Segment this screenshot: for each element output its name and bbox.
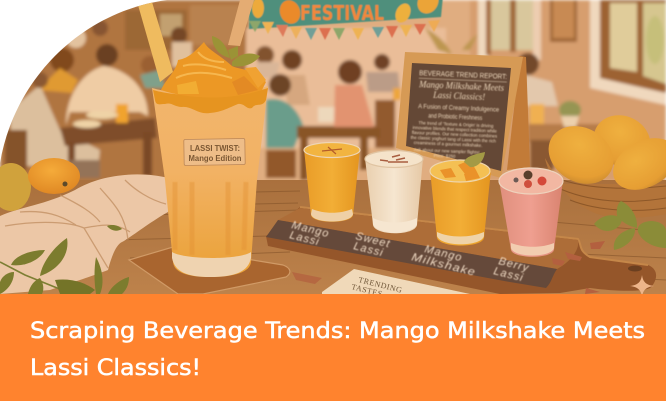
banner mango icons — [252, 0, 443, 27]
sign body: The trend of 'Texture & Origin' is driving — [418, 120, 494, 129]
paddle board: Lassi — [492, 265, 525, 284]
label: mango milkshake: Mango — [423, 243, 464, 264]
menu sign on easel: Lassi Classics! — [432, 90, 485, 102]
mint sprig left — [0, 225, 129, 294]
menu sign on easel — [396, 52, 530, 178]
picture frame — [550, 0, 577, 42]
wooden spoon — [228, 0, 254, 46]
sign heading: BEVERAGE TREND REPORT: — [419, 68, 507, 81]
basket of mangoes — [545, 115, 666, 211]
label: berry lassi: Berry — [497, 255, 531, 275]
glass label: Mango Edition — [188, 153, 242, 163]
basket — [545, 158, 666, 192]
menu sign on easel: innovative blends that respect tradition while — [412, 125, 498, 134]
sign wooden frame — [396, 52, 523, 178]
leather coaster — [129, 247, 290, 294]
menu sign on easel: Price: $250 — [434, 153, 456, 159]
plant behind sign — [425, 28, 478, 54]
right window — [489, 0, 534, 52]
small glass: berry lassi — [499, 168, 563, 257]
mango fruit — [594, 115, 650, 165]
big window — [590, 0, 666, 105]
paddle board: Lassi — [288, 229, 321, 248]
centre diners — [256, 46, 274, 64]
bunting flags — [249, 20, 440, 40]
rose petals — [292, 241, 605, 294]
left table — [60, 118, 157, 146]
mango rim drip — [153, 88, 268, 113]
banner text: FESTIVAL — [300, 1, 384, 25]
wooden table — [0, 180, 666, 294]
mint garnish — [212, 36, 260, 67]
left diners — [96, 44, 118, 66]
paddle board — [266, 207, 656, 294]
small glass: mango milkshake — [430, 152, 491, 246]
glass label — [184, 138, 245, 166]
photo panel: cafe scene — [0, 0, 666, 299]
title text: Scraping Beverage Trends: Mango Milkshake Meets — [30, 319, 645, 344]
menu sign on easel: the classic yoghurt tang of Lassi with the rich — [411, 135, 497, 144]
mint sprig right — [594, 201, 666, 250]
chalk label strip — [266, 220, 557, 288]
large mango lassi glass — [152, 36, 268, 277]
label: mango lassi: Mango — [290, 219, 331, 240]
glass label: LASSI TWIST: — [190, 143, 240, 153]
menu sign on easel: Ask about our new sampler flights! — [414, 147, 480, 155]
title text: Lassi Classics! — [30, 356, 201, 381]
small glass: mango lassi — [304, 142, 360, 222]
glass body — [152, 86, 268, 277]
menu sign on easel: and Probiotic Freshness — [428, 113, 483, 122]
small glass: sweet lassi — [365, 150, 423, 233]
sign script title: Mango Milkshake Meets — [418, 79, 505, 93]
menu sign on easel: creaminess of a gourmet milkshake. — [414, 140, 483, 148]
paddle board: Lassi — [352, 240, 385, 259]
title banner — [0, 294, 666, 401]
label: sweet lassi: Sweet — [354, 230, 392, 251]
sign subtitle: A Fusion of Creamy Indulgence — [418, 103, 500, 114]
linen cloth — [0, 174, 168, 294]
mango swirl topping — [161, 42, 266, 98]
side table — [528, 124, 608, 142]
fruit at left — [0, 158, 80, 211]
trending tastes card — [322, 269, 470, 299]
festival banner — [249, 0, 443, 40]
sparkle watermark — [630, 275, 654, 297]
trending tastes card: TASTES — [351, 282, 383, 299]
paddle board: Milkshake — [410, 251, 477, 279]
straw — [138, 2, 173, 82]
man at right — [517, 53, 539, 75]
cafe background wall — [0, 0, 666, 200]
chalkboard — [406, 63, 511, 171]
menu sign on easel: flavour profiles. Our new collection combines — [412, 130, 497, 139]
title text — [30, 319, 645, 381]
sign back leg — [507, 56, 530, 170]
trending tastes card: TRENDING — [358, 275, 403, 295]
